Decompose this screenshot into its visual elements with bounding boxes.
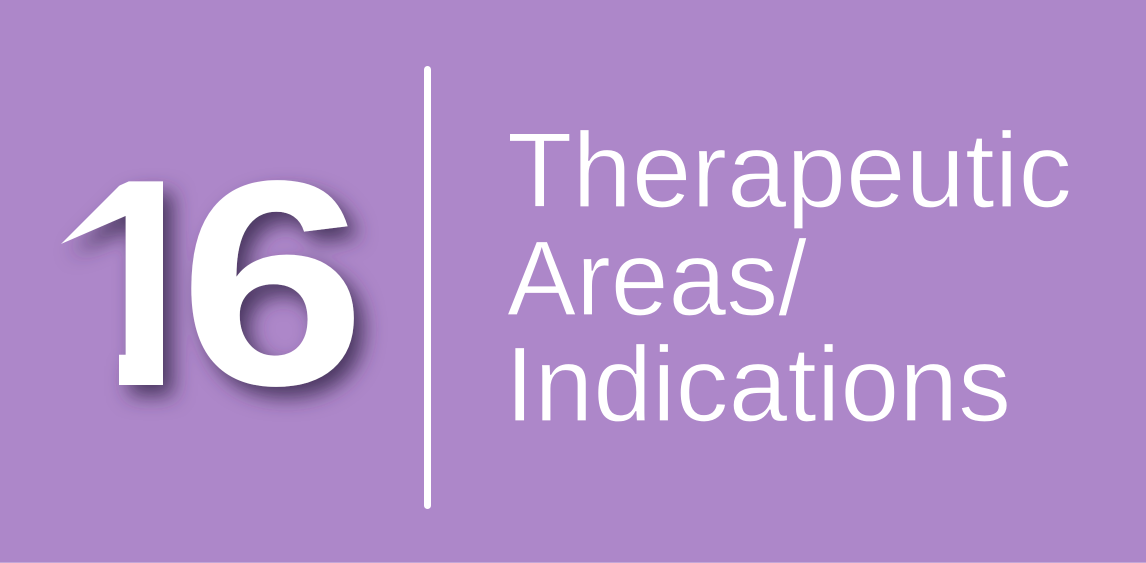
big number: 1: [26, 117, 263, 448]
big number: [61, 178, 378, 412]
label line 3: Indications: [505, 324, 1011, 444]
label line 1: Therapeutic: [507, 110, 1072, 230]
label line 2: Areas/: [507, 218, 807, 338]
label text: [505, 110, 1072, 444]
big number: 6: [179, 120, 366, 446]
vertical divider: [424, 66, 431, 509]
